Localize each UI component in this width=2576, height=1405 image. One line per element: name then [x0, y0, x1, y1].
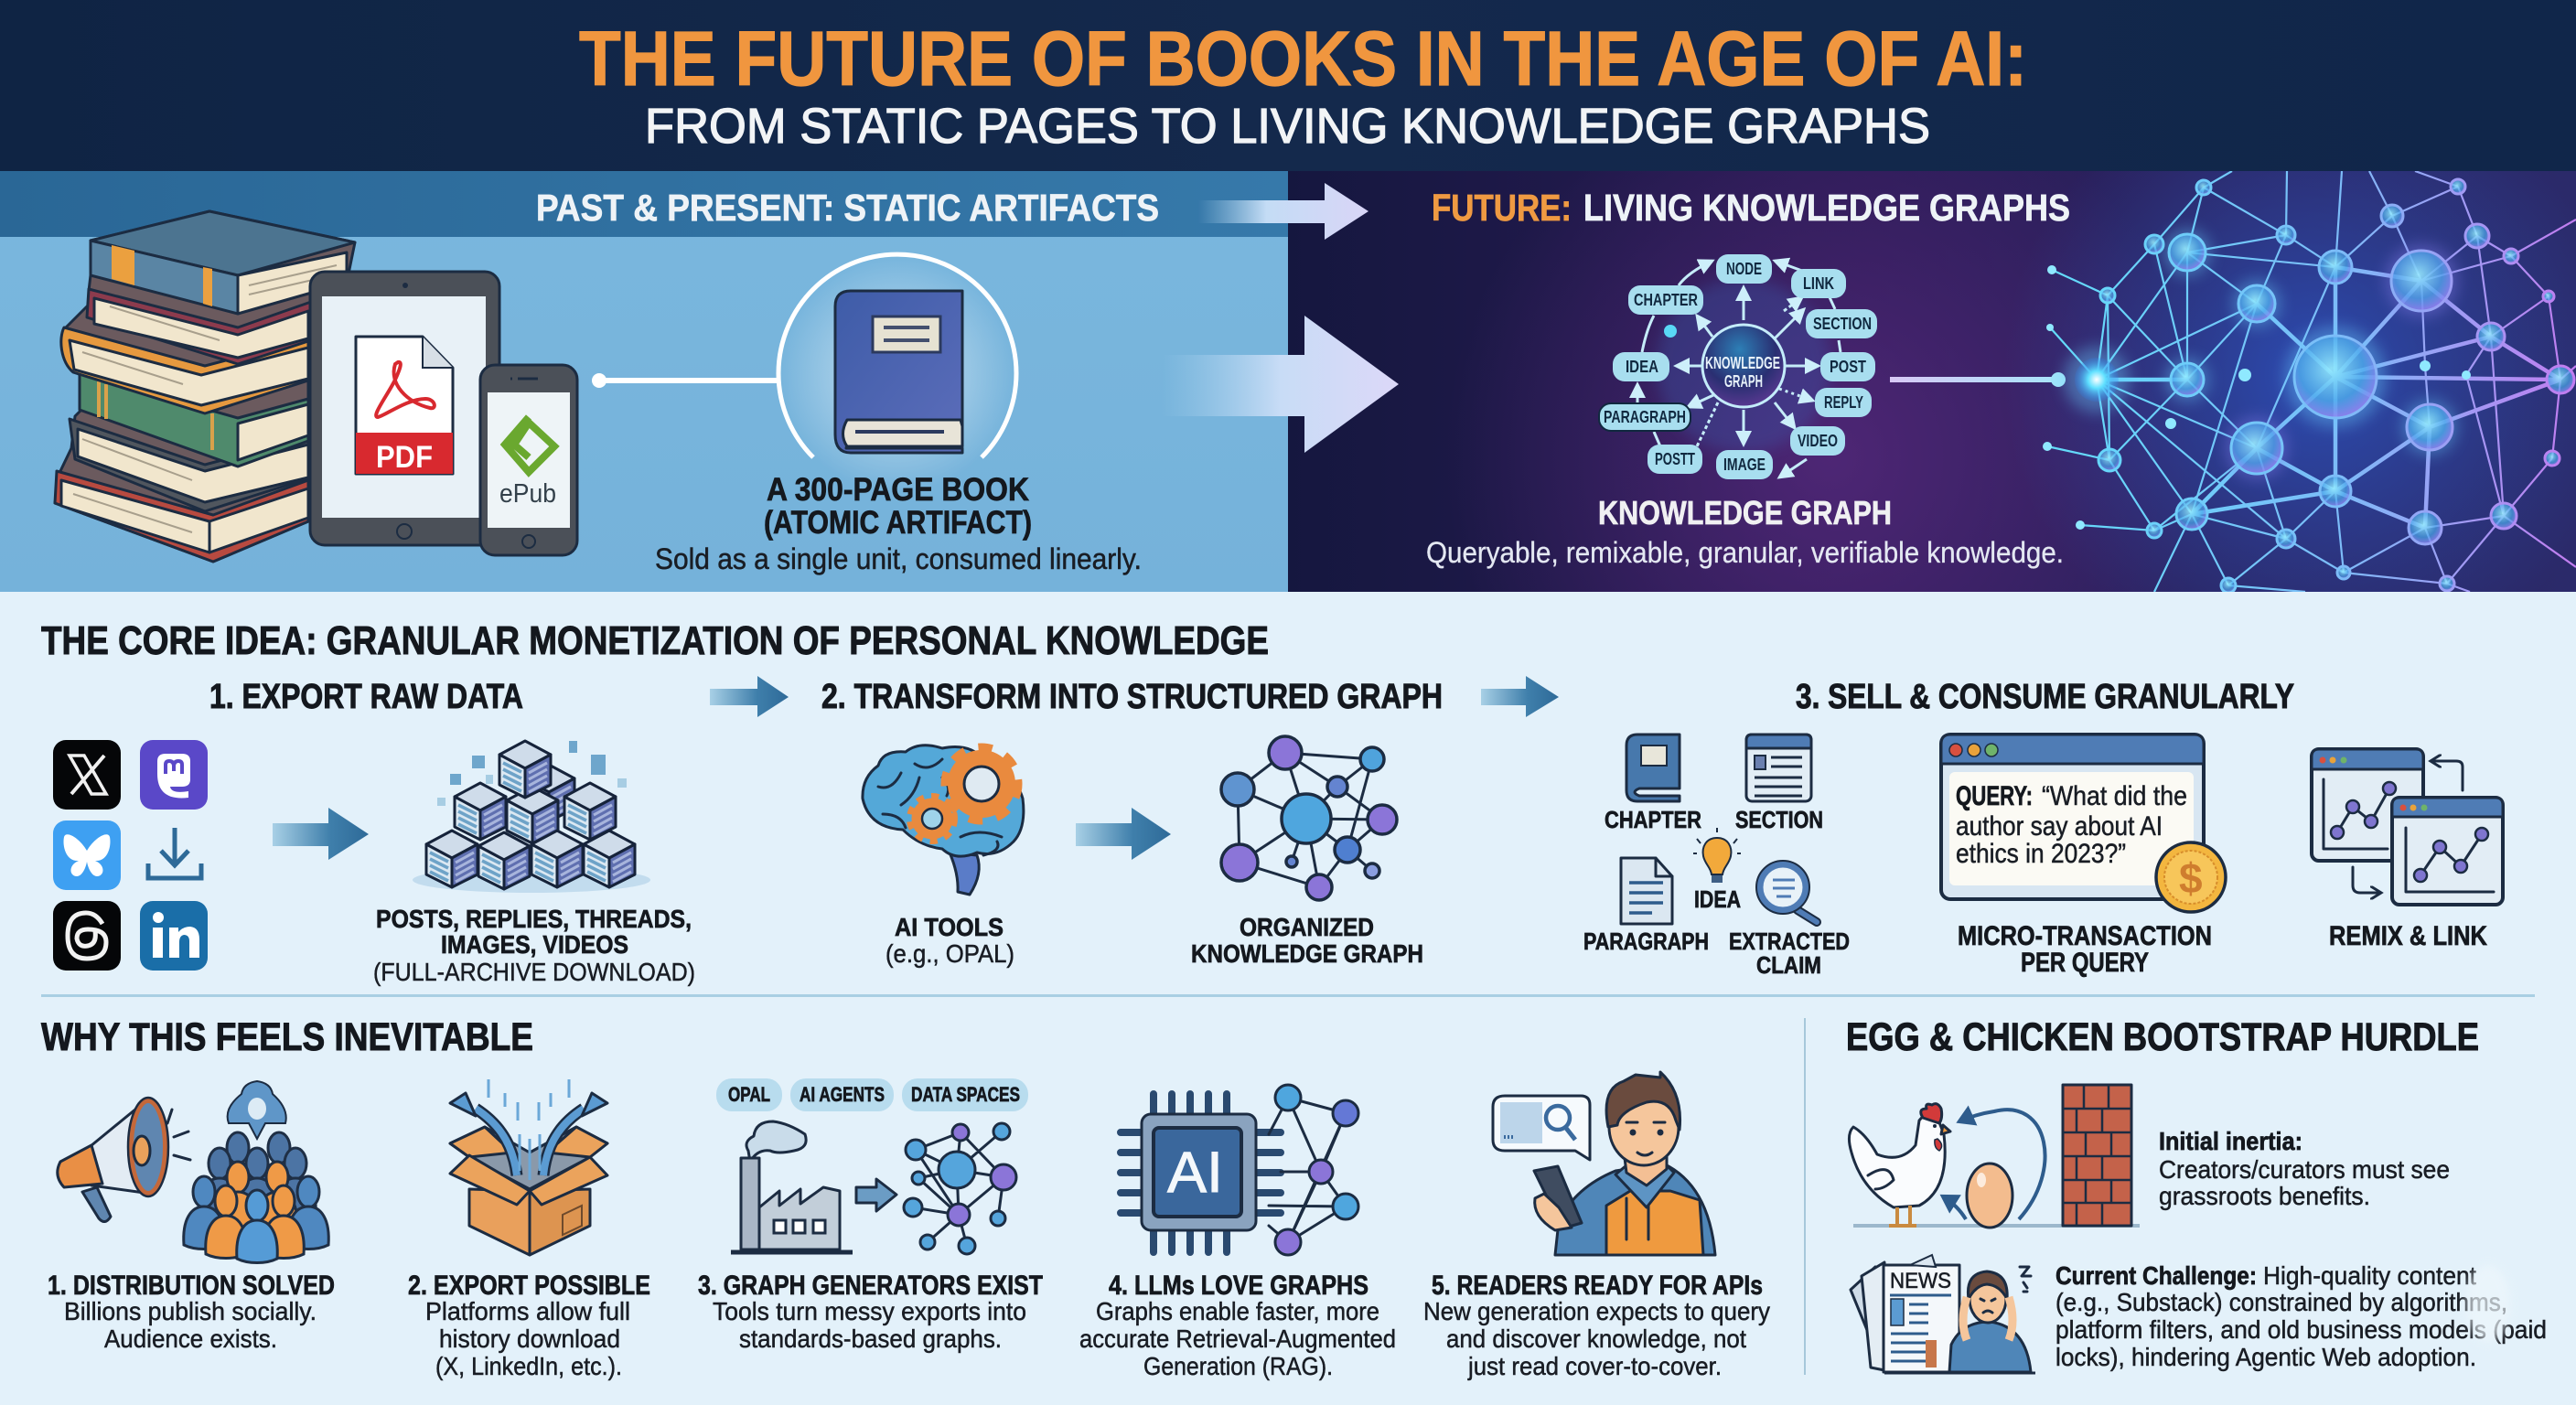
text: initial inertia: [2159, 1127, 2450, 1210]
text: 3. GRAPH GENERATORS EXIST: [698, 1271, 1043, 1301]
caption: organized graph: KNOWLEDGE GRAPH: [1191, 939, 1423, 968]
icon: crowd with speech bubble: [184, 1081, 328, 1262]
text: standards-based graphs.: [739, 1325, 1002, 1353]
query text: QUERY:: [1956, 781, 2033, 811]
label: idea: IDEA: [1694, 885, 1741, 913]
connector line: [592, 373, 778, 388]
knowledge graph hub diagram: POST: [1830, 358, 1866, 376]
text: 2. EXPORT POSSIBLE: [408, 1271, 650, 1301]
heading: future: [1432, 187, 2070, 229]
text: Graphs enable faster, more: [1096, 1297, 1379, 1325]
icon: phone with ePub: ePub: [499, 479, 556, 509]
icon: open box: [450, 1079, 607, 1255]
text: [1423, 1271, 1770, 1380]
caption: AI tools: AI TOOLS: [895, 913, 1004, 941]
icon: person with phone: [1534, 1072, 1715, 1255]
icon: AI chip: AI: [1167, 1141, 1223, 1205]
step 2 heading: 2. TRANSFORM INTO STRUCTURED GRAPH: [821, 678, 1443, 716]
icon: paragraph: [1621, 858, 1672, 924]
text: current challenge: High-quality content: [2263, 1261, 2476, 1290]
label: 300-page book: [655, 472, 1142, 575]
heading: core idea: THE CORE IDEA: GRANULAR MONETIZATION OF PERSONAL KNOWLEDGE: [41, 618, 1269, 663]
icon: remix windows: [2312, 749, 2503, 905]
caption: raw data: POSTS, REPLIES, THREADS,: [376, 905, 692, 933]
caption: micro-transaction: [1958, 921, 2212, 978]
query text: [1956, 781, 2187, 869]
text: Audience exists.: [104, 1325, 277, 1353]
text: current challenge: [2055, 1261, 2547, 1371]
text: Platforms allow full: [425, 1297, 630, 1325]
panel: future: [1288, 171, 2576, 593]
caption: micro-transaction: PER QUERY: [2021, 948, 2149, 978]
knowledge graph hub diagram: [1599, 254, 1877, 479]
icon: megaphone: [58, 1098, 190, 1222]
icon: download: [148, 828, 201, 878]
knowledge graph hub diagram: POSTT: [1655, 450, 1695, 468]
icon: stack of books: [55, 211, 355, 562]
text: [408, 1271, 650, 1380]
icon: section: [1746, 735, 1811, 801]
arrow: platforms to data: [273, 808, 369, 860]
label: extracted claim: CLAIM: [1756, 951, 1821, 979]
caption: micro-transaction: MICRO-TRANSACTION: [1958, 921, 2212, 951]
label: extracted claim: EXTRACTED: [1729, 928, 1850, 955]
heading: why inevitable: WHY THIS FEELS INEVITABLE: [41, 1015, 533, 1059]
icon: Threads: [53, 901, 121, 971]
text: New generation expects to query: [1423, 1297, 1770, 1325]
subtitle: FROM STATIC PAGES TO LIVING KNOWLEDGE GRAPHS: [645, 99, 1930, 154]
pills: [716, 1078, 1028, 1111]
knowledge graph hub diagram: NODE: [1726, 260, 1762, 278]
icons: social platforms: [53, 740, 208, 971]
text: current challenge: Current Challenge:: [2055, 1261, 2257, 1290]
text: current challenge: (e.g., Substack) constrained by algorithms,: [2055, 1288, 2507, 1316]
icon: search bubble: [1493, 1096, 1590, 1160]
label: 300-page book: A 300-PAGE BOOK: [767, 472, 1029, 508]
caption: AI tools: (e.g., OPAL): [886, 939, 1014, 968]
icon: LinkedIn: [140, 901, 208, 971]
text: 1. DISTRIBUTION SOLVED: [48, 1271, 335, 1301]
icon: X: [53, 740, 121, 810]
heading: hurdle: EGG & CHICKEN BOOTSTRAP HURDLE: [1846, 1015, 2479, 1059]
label: paragraph: PARAGRAPH: [1583, 928, 1709, 955]
heading: past and present: PAST & PRESENT: STATIC ARTIFACTS: [536, 187, 1159, 229]
text: Tools turn messy exports into: [713, 1297, 1026, 1325]
item 5: readers ready: [1423, 1072, 1770, 1380]
caption: AI tools: [886, 913, 1014, 968]
label: chapter: CHAPTER: [1605, 806, 1701, 833]
icon: chapter: [1626, 735, 1680, 801]
text: current challenge: locks), hindering Agentic Web adoption.: [2055, 1343, 2476, 1371]
glowing network graphic: [2043, 171, 2576, 593]
icon: organized knowledge graph: [1221, 736, 1397, 900]
text: initial inertia: Initial inertia:: [2159, 1127, 2302, 1155]
icon: data cubes: [413, 741, 650, 893]
heading: future: FUTURE:: [1432, 187, 1572, 229]
panel: past and present: [0, 171, 1288, 592]
text: 4. LLMs LOVE GRAPHS: [1109, 1271, 1368, 1301]
query text: “What did the: [2042, 781, 2187, 811]
pills: AI AGENTS: [800, 1083, 885, 1106]
knowledge graph hub diagram: SECTION: [1813, 315, 1872, 333]
text: initial inertia: Creators/curators must see: [2159, 1155, 2450, 1184]
knowledge graph hub diagram: IDEA: [1626, 358, 1658, 376]
label: extracted claim: [1729, 928, 1850, 979]
item 2: export possible: [408, 1079, 650, 1380]
icon: brain with gears: [863, 745, 1024, 895]
heading: future: LIVING KNOWLEDGE GRAPHS: [1583, 187, 2070, 229]
knowledge graph hub diagram: IMAGE: [1723, 456, 1766, 474]
section: why this feels inevitable: [41, 1015, 1770, 1380]
icon: tablet with PDF: [310, 272, 499, 545]
arrow: step 1 to 2: [710, 676, 789, 717]
knowledge graph hub diagram: PARAGRAPH: [1604, 408, 1686, 426]
knowledge graph hub diagram: REPLY: [1824, 393, 1863, 412]
panel: egg and chicken hurdle: [1846, 1015, 2547, 1373]
caption: raw data: IMAGES, VIDEOS: [441, 930, 628, 959]
label: 300-page book: Sold as a single unit, consumed linearly.: [655, 542, 1142, 575]
text: accurate Retrieval-Augmented: [1079, 1325, 1396, 1353]
label: knowledge graph: [1426, 494, 2064, 569]
acrobat glyph: [376, 362, 435, 417]
text: (X, LinkedIn, etc.).: [435, 1352, 622, 1380]
label: knowledge graph: Queryable, remixable, granular, verifiable knowledge.: [1426, 536, 2064, 569]
caption: organized graph: ORGANIZED: [1240, 913, 1374, 941]
knowledge graph hub diagram: KNOWLEDGE: [1705, 354, 1780, 372]
icon: graph nodes: [1269, 1085, 1358, 1255]
caption: organized graph: [1191, 913, 1423, 968]
text: [1079, 1271, 1396, 1380]
item 4: LLMs love graphs: [1079, 1085, 1396, 1380]
knowledge graph hub diagram: LINK: [1803, 274, 1834, 293]
title: THE FUTURE OF BOOKS IN THE AGE OF AI:: [579, 16, 2027, 102]
text: current challenge: platform filters, and old business models (paid: [2055, 1315, 2547, 1344]
coin: $: [2179, 854, 2203, 902]
knowledge graph hub diagram: GRAPH: [1724, 372, 1763, 391]
header banner: [0, 0, 2576, 171]
icon: graph: [904, 1123, 1016, 1254]
text: Generation (RAG).: [1143, 1352, 1333, 1380]
text: just read cover-to-cover.: [1467, 1352, 1722, 1380]
text: Billions publish socially.: [64, 1297, 317, 1325]
label: section: SECTION: [1735, 806, 1823, 833]
coin: [2156, 842, 2226, 912]
icon: chicken, egg, wall: [1849, 1085, 2140, 1228]
caption: raw data: (FULL-ARCHIVE DOWNLOAD): [373, 958, 695, 986]
connector to network: [1890, 372, 2066, 387]
knowledge graph hub diagram: VIDEO: [1798, 432, 1838, 450]
label: 300-page book: (ATOMIC ARTIFACT): [764, 505, 1032, 541]
step 3 heading: 3. SELL & CONSUME GRANULARLY: [1796, 678, 2294, 716]
icon: AI chip: [1121, 1094, 1281, 1252]
arrow: past to future (large): [1162, 316, 1399, 453]
icon: query window: [1941, 735, 2226, 912]
label: remix and link: REMIX & LINK: [2329, 921, 2487, 951]
text: history download: [439, 1325, 620, 1353]
icon: tablet with PDF: PDF: [376, 440, 433, 475]
icon: magnifier: [1756, 861, 1817, 922]
icon: factory: [731, 1121, 853, 1252]
item 3: graph generators: [698, 1078, 1043, 1353]
text: initial inertia: grassroots benefits.: [2159, 1182, 2370, 1210]
arrow: past to future (small): [1198, 183, 1368, 240]
icon: single atomic book: [778, 254, 1016, 492]
text: and discover knowledge, not: [1446, 1325, 1746, 1353]
icon: phone with ePub: [480, 365, 577, 555]
knowledge graph hub diagram: CHAPTER: [1634, 291, 1698, 309]
text: [48, 1271, 335, 1353]
pills: DATA SPACES: [911, 1083, 1020, 1106]
step 1 heading: 1. EXPORT RAW DATA: [209, 678, 523, 716]
icon: idea bulb: [1693, 828, 1741, 883]
label: knowledge graph: KNOWLEDGE GRAPH: [1598, 494, 1892, 531]
icon: newspaper and worried person: [1851, 1255, 2035, 1373]
text: [698, 1271, 1043, 1353]
item 1: distribution solved: [48, 1081, 335, 1353]
text: 5. READERS READY FOR APIs: [1432, 1271, 1763, 1301]
query text: author say about AI: [1956, 811, 2163, 842]
node labels: [1599, 254, 1877, 479]
arrow: step 2 to 3: [1481, 676, 1559, 717]
arrow: tools to graph: [1076, 808, 1171, 860]
section: core idea: [41, 618, 2503, 986]
icon: newspaper and worried person: NEWS: [1890, 1269, 1951, 1293]
caption: raw data: [373, 905, 695, 986]
arrow: [856, 1179, 896, 1211]
pills: OPAL: [728, 1083, 770, 1106]
icon: Mastodon: [140, 740, 208, 810]
query text: ethics in 2023?”: [1956, 839, 2126, 869]
icon: Bluesky: [53, 820, 121, 890]
